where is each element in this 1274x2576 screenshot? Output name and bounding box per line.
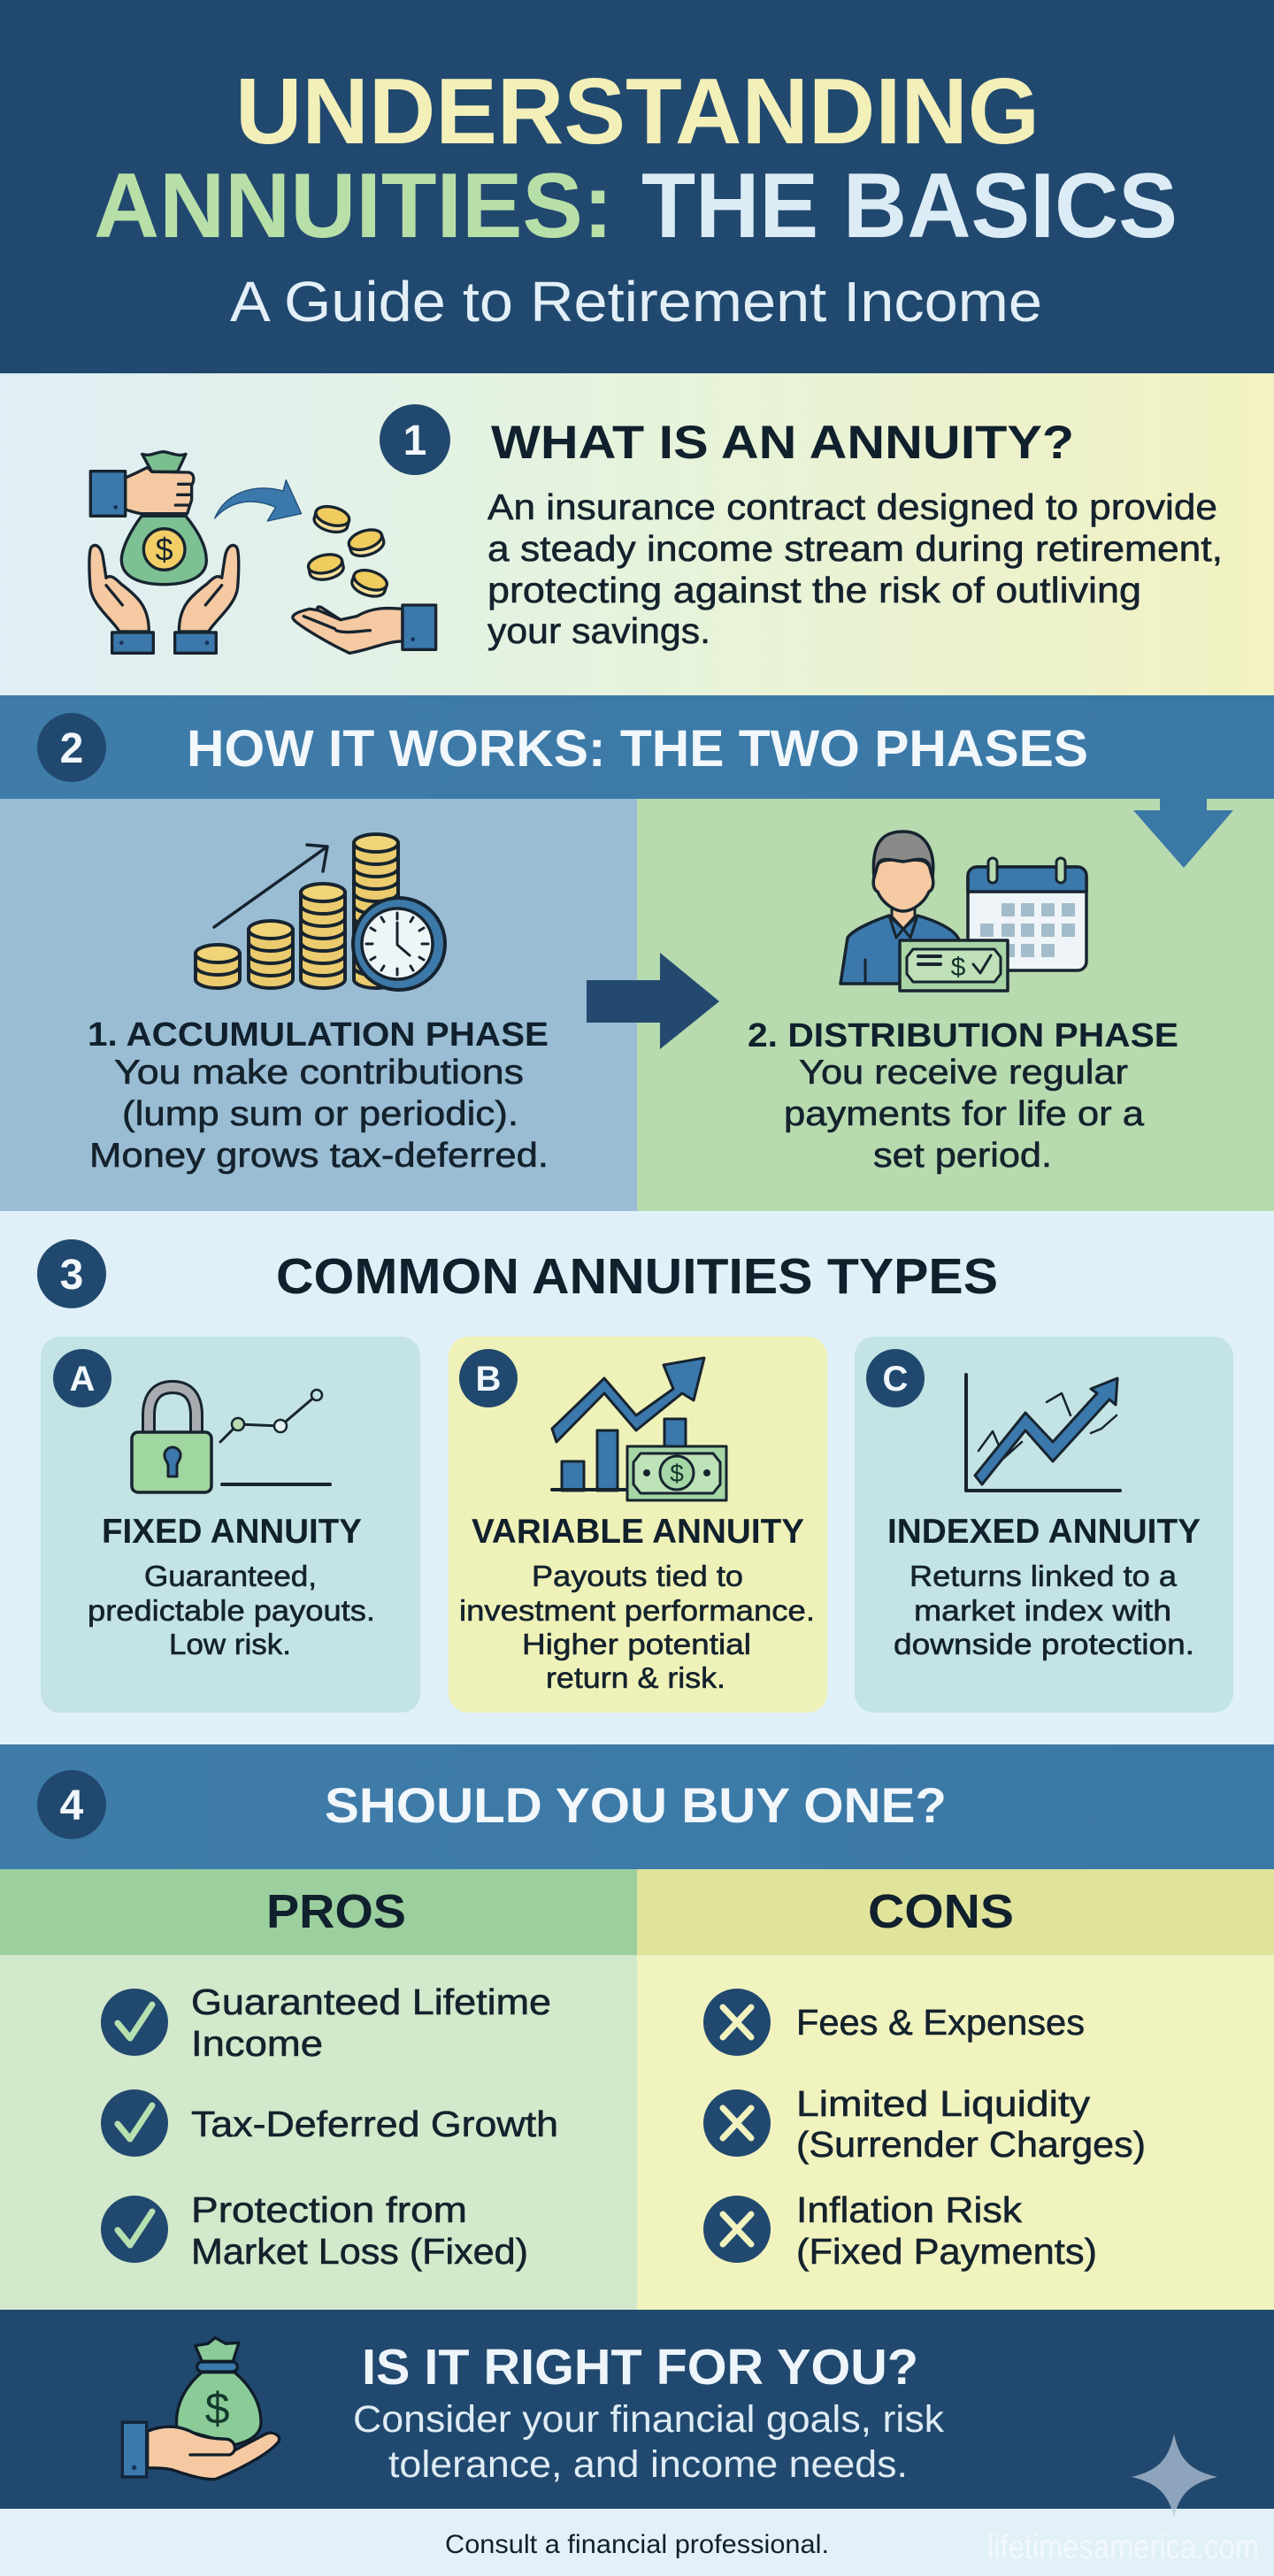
title line 2: ANNUITIES:	[94, 155, 613, 257]
icon: money bag passing to coins and hand: $	[156, 532, 173, 568]
card text: Low risk.	[169, 1628, 291, 1660]
closing text: Consider your financial goals, risk	[353, 2398, 945, 2441]
icon: sparkle watermark	[1132, 2434, 1217, 2518]
panel: distribution phase	[637, 799, 1274, 1211]
arrow: accumulation to distribution	[587, 953, 719, 1049]
badge 1: 1	[403, 418, 426, 464]
panel: common annuity types	[0, 1211, 1274, 1744]
phase 1 text	[89, 1054, 549, 1175]
card text: market index with	[914, 1594, 1171, 1627]
panel: accumulation phase	[0, 799, 637, 1211]
phase 2 text	[784, 1054, 1144, 1175]
pro: protection from market loss: Protection from	[191, 2189, 467, 2230]
card text: downside protection.	[894, 1628, 1194, 1660]
con: limited liquidity	[703, 2083, 1146, 2165]
card text	[894, 1560, 1194, 1660]
card title: FIXED ANNUITY	[102, 1513, 362, 1551]
badge C: C	[883, 1360, 908, 1399]
heading: common annuities types: COMMON ANNUITIES TYPES	[276, 1248, 998, 1305]
icon: hand holding money bag	[122, 2338, 280, 2480]
badge 4: 4	[60, 1782, 84, 1829]
badge B	[459, 1349, 518, 1407]
closing text	[353, 2398, 945, 2486]
icon: coin stacks with clock	[196, 834, 445, 990]
heading: what is an annuity: WHAT IS AN ANNUITY?	[491, 417, 1074, 469]
icon: person with calendar and bill: $	[951, 953, 966, 982]
phase 1 text: (lump sum or periodic).	[122, 1095, 518, 1133]
panel: cons	[637, 1869, 1274, 2310]
con: limited liquidity: Limited Liquidity	[796, 2083, 1091, 2124]
badge 4	[37, 1770, 106, 1839]
badge 3: 3	[60, 1252, 83, 1299]
pros heading: PROS	[266, 1885, 406, 1938]
card text: predictable payouts.	[88, 1594, 375, 1627]
title line 2: THE BASICS	[641, 155, 1178, 257]
phase 2 text: You receive regular	[799, 1054, 1128, 1092]
card text: Higher potential	[522, 1628, 751, 1660]
pro: guaranteed lifetime income: Guaranteed Lifetime	[191, 1982, 551, 2022]
icon: rising arrow, bars and bill: $	[670, 1460, 684, 1487]
panel: header	[0, 0, 1274, 373]
panel: pros	[0, 1869, 637, 2310]
card text: Payouts tied to	[532, 1560, 743, 1592]
badge 3	[37, 1239, 106, 1308]
card text: investment performance.	[459, 1594, 815, 1627]
card title: INDEXED ANNUITY	[887, 1513, 1201, 1551]
card text	[459, 1560, 815, 1694]
closing heading: IS IT RIGHT FOR YOU?	[362, 2339, 918, 2396]
pro: tax-deferred growth	[101, 2089, 558, 2157]
icon: padlock with line	[132, 1387, 330, 1492]
phase 1 text: Money grows tax-deferred.	[89, 1137, 549, 1175]
icon: hand holding money bag: $	[205, 2383, 230, 2433]
con: inflation risk	[703, 2189, 1097, 2272]
cons heading: CONS	[868, 1885, 1014, 1938]
pro: protection from market loss: Market Loss (Fixed)	[191, 2231, 528, 2272]
panel: is it right for you	[0, 2310, 1274, 2509]
card text	[88, 1560, 375, 1660]
badge 2	[37, 713, 106, 782]
footnote: consult a professional: Consult a financial professional.	[445, 2530, 829, 2559]
con: fees and expenses	[703, 1989, 1085, 2056]
icon: person with calendar and bill	[840, 832, 1086, 991]
card text: Guaranteed,	[144, 1560, 317, 1592]
title line 2	[94, 155, 1178, 257]
definition text: a steady income stream during retirement,	[487, 528, 1223, 569]
con: inflation risk: (Fixed Payments)	[796, 2231, 1097, 2272]
con: inflation risk: Inflation Risk	[796, 2189, 1023, 2230]
card title: VARIABLE ANNUITY	[472, 1513, 804, 1551]
heading: should you buy one: SHOULD YOU BUY ONE?	[325, 1777, 947, 1833]
panel: what is an annuity	[0, 373, 1274, 697]
title line 1: UNDERSTANDING	[235, 59, 1040, 164]
card: indexed annuity	[855, 1337, 1233, 1713]
definition text	[487, 487, 1223, 651]
definition text: your savings.	[487, 610, 710, 651]
badge 1	[380, 404, 450, 475]
icon: money bag passing to coins and hand	[89, 452, 436, 653]
pro: protection from market loss	[101, 2189, 528, 2272]
pro: guaranteed lifetime income: Income	[191, 2023, 323, 2064]
icon: rising arrow, bars and bill	[552, 1358, 726, 1500]
panel: how it works bar	[0, 695, 1274, 799]
badge A: A	[70, 1360, 95, 1399]
pro: tax-deferred growth: Tax-Deferred Growth	[191, 2104, 558, 2144]
con: limited liquidity: (Surrender Charges)	[796, 2124, 1146, 2165]
subtitle: A Guide to Retirement Income	[230, 270, 1042, 334]
badge C	[866, 1349, 925, 1407]
card text: return & risk.	[546, 1661, 725, 1694]
card: variable annuity	[449, 1337, 827, 1713]
panel: should you buy one bar	[0, 1744, 1274, 1869]
badge A	[53, 1349, 111, 1407]
badge 2: 2	[60, 725, 83, 772]
phase 2 title: 2. DISTRIBUTION PHASE	[748, 1017, 1178, 1054]
badge B: B	[476, 1360, 501, 1399]
definition text: An insurance contract designed to provide	[487, 487, 1217, 527]
con: fees and expenses: Fees & Expenses	[796, 2002, 1085, 2043]
icon: index chart	[966, 1375, 1120, 1491]
phase 1 title: 1. ACCUMULATION PHASE	[88, 1016, 549, 1054]
phase 2 text: payments for life or a	[784, 1095, 1144, 1133]
definition text: protecting against the risk of outliving	[487, 570, 1141, 610]
card: fixed annuity	[41, 1337, 420, 1713]
arrow: bar pointing down	[1133, 799, 1233, 868]
heading: how it works: HOW IT WORKS: THE TWO PHASES	[187, 720, 1088, 778]
card text: Returns linked to a	[909, 1560, 1178, 1592]
phase 1 text: You make contributions	[114, 1054, 524, 1092]
phase 2 text: set period.	[873, 1137, 1052, 1175]
pro: guaranteed lifetime income	[101, 1982, 551, 2064]
closing text: tolerance, and income needs.	[388, 2443, 908, 2486]
